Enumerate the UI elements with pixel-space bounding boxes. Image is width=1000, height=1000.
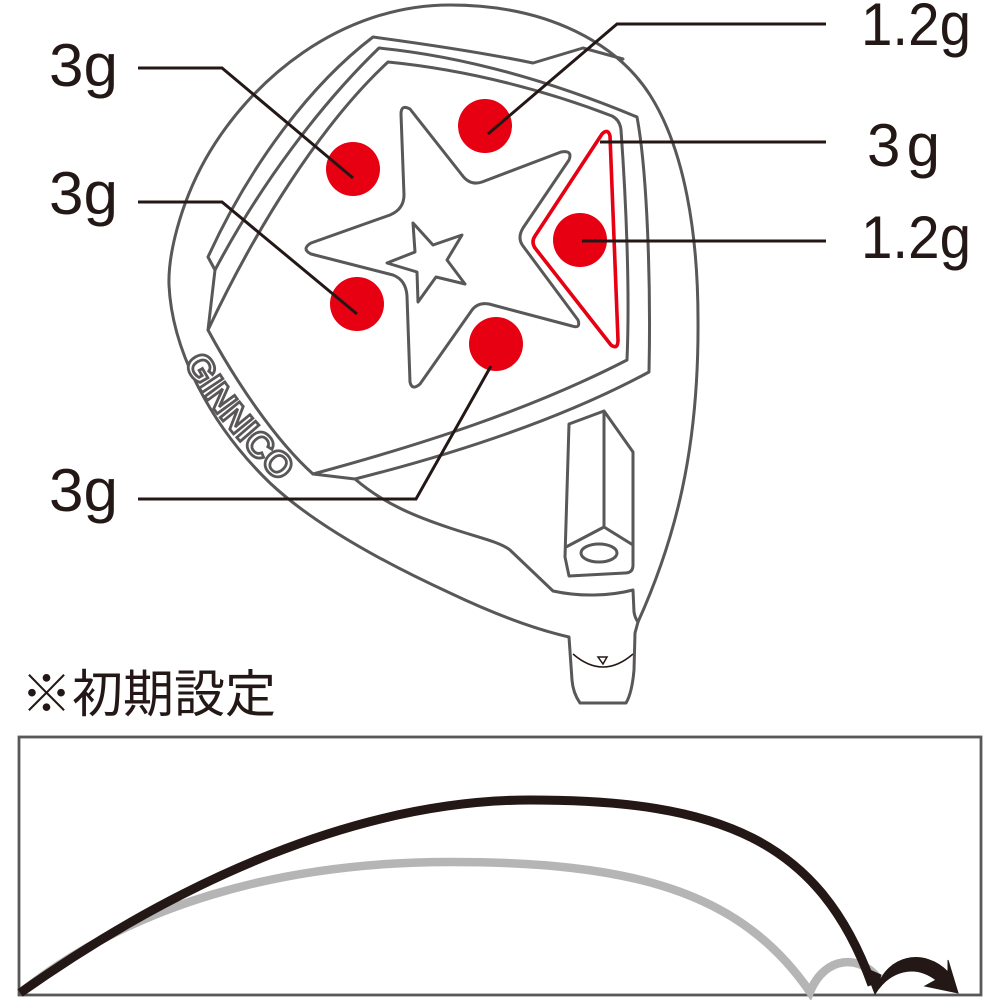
leader line: middle left 3g <box>138 202 357 314</box>
red weight: top <box>458 99 512 153</box>
gray trajectory <box>20 862 878 993</box>
red weight: upper left <box>326 142 380 196</box>
leader line: upper left 3g <box>138 68 353 178</box>
large star <box>306 107 579 387</box>
chart frame <box>19 737 981 995</box>
red triangle weight track <box>533 131 618 347</box>
leader line: right 1.2g <box>582 240 826 242</box>
leader line: lower left 3g <box>138 366 491 499</box>
small star <box>387 223 465 302</box>
club head illustration <box>167 4 700 704</box>
brand text: GINNICO <box>186 354 293 478</box>
crown edge line <box>208 37 623 330</box>
black bounce arrow <box>865 958 958 994</box>
leader line: top right 1.2g <box>488 24 826 134</box>
label: 3g upper left: 3g <box>49 32 118 99</box>
red weight: right <box>553 213 607 267</box>
adapter hole <box>581 544 617 562</box>
hosel triangle mark <box>598 657 607 664</box>
red weight: bottom <box>469 317 523 371</box>
trajectory chart <box>19 737 981 995</box>
note: initial setting: ※初期設定 <box>21 666 276 723</box>
label: 3g lower left: 3g <box>49 457 118 524</box>
face outer line <box>215 48 650 479</box>
leader line: right 3g <box>600 140 826 144</box>
hosel ring <box>573 654 633 667</box>
label: 3g right: 3g <box>867 112 940 179</box>
label: 3g middle left: 3g <box>49 160 118 227</box>
red weight: lower left <box>330 277 384 331</box>
black trajectory <box>20 800 872 993</box>
face inner line <box>208 62 628 474</box>
hosel band and sole line <box>355 479 638 622</box>
head outer outline <box>169 5 698 703</box>
label: 1.2g right: 1.2g <box>861 204 971 271</box>
hosel adapter <box>565 411 633 576</box>
